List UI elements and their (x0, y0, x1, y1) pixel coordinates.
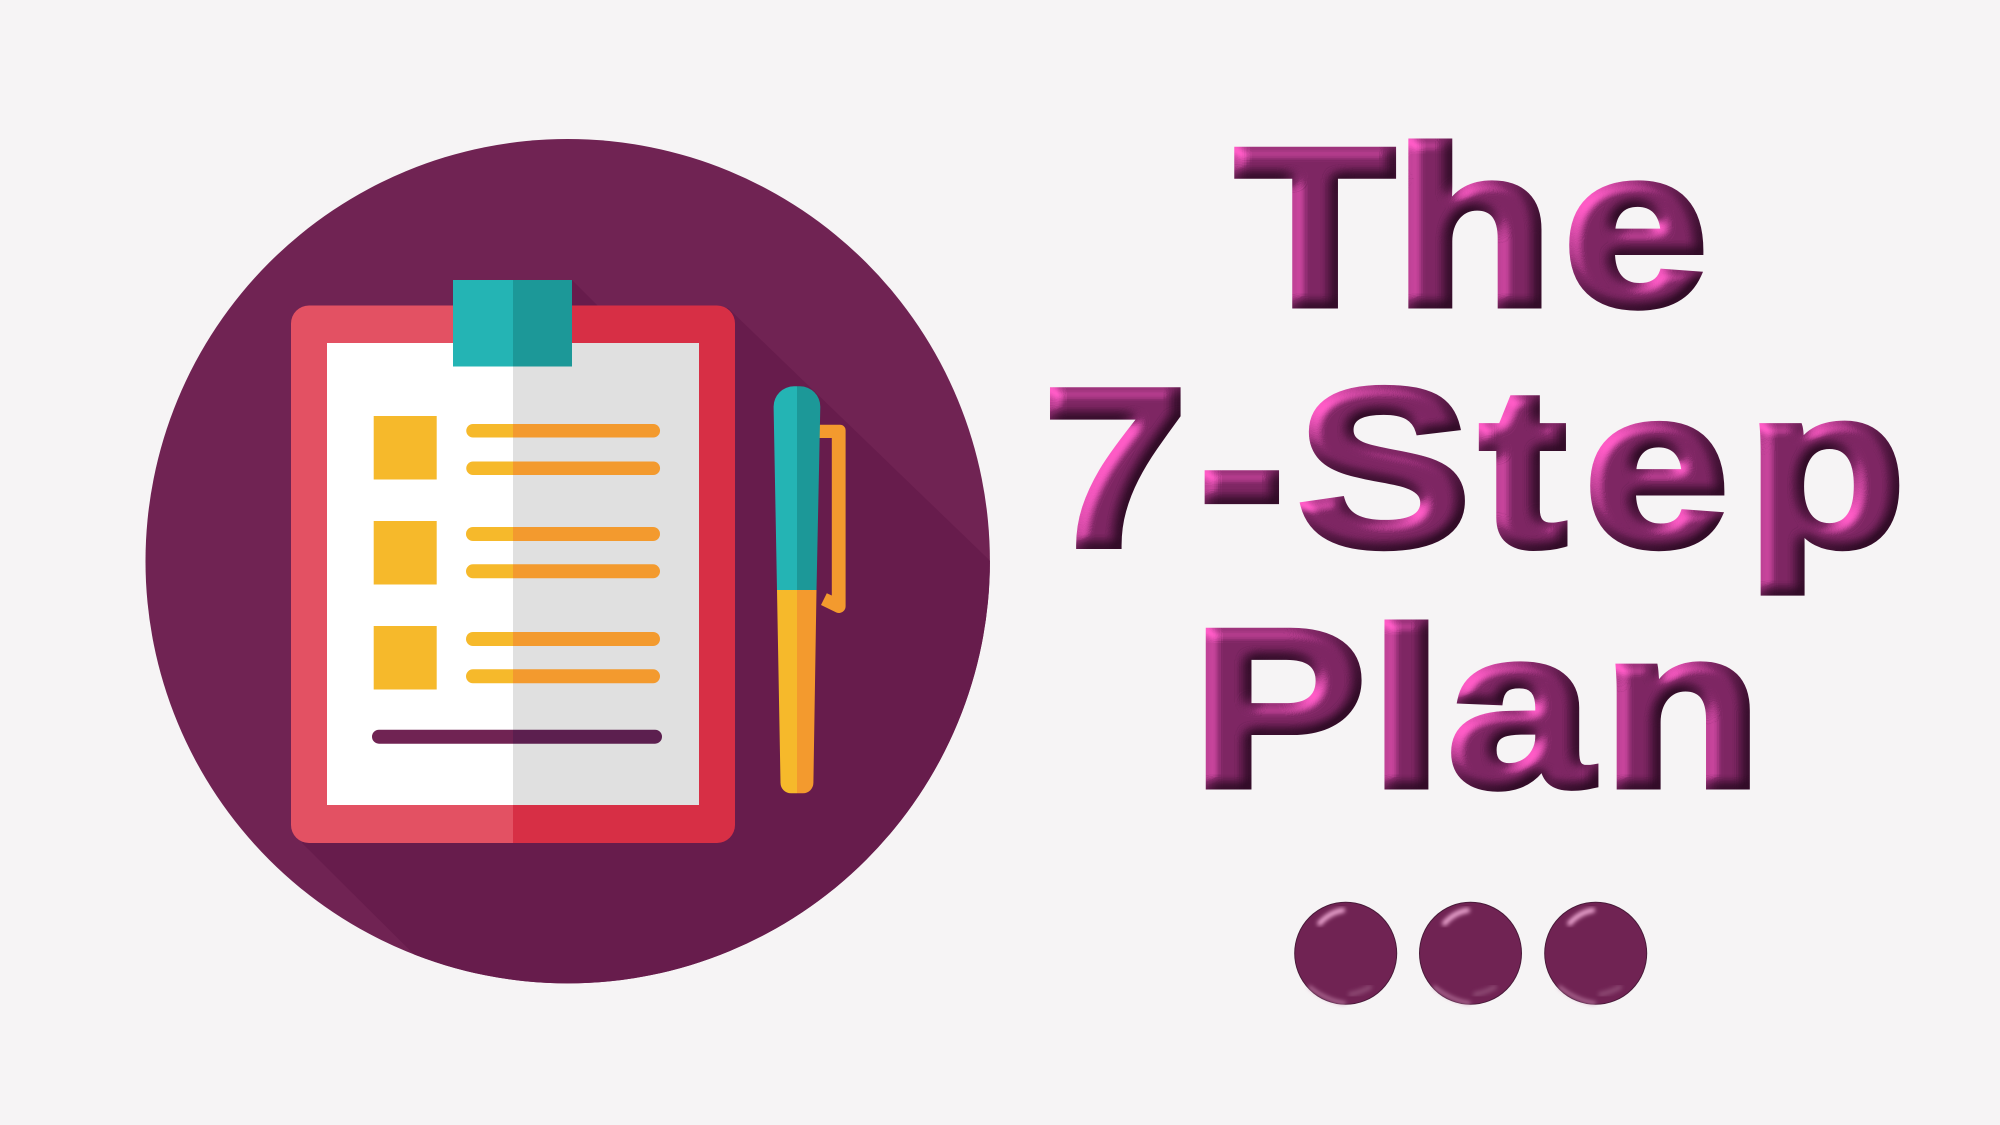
infographic canvas (146, 138, 1900, 1007)
pen (774, 386, 846, 793)
title: The 7-Step Plan (1043, 101, 1906, 834)
clipboard board (291, 306, 735, 843)
title line: Plan: Plan (1192, 582, 1762, 834)
title line: The: The (1235, 101, 1708, 353)
title line: 7-Step: 7-Step (1043, 341, 1906, 594)
checklist row 2 (374, 521, 660, 584)
pen barrel upper (774, 386, 820, 590)
checklist row 1 (374, 416, 660, 480)
dot 2 (1420, 902, 1522, 1004)
paper sheet (327, 343, 699, 805)
purple circle (146, 139, 990, 983)
signature line (372, 730, 662, 744)
icon: clipboard and pen in purple circle (146, 139, 990, 984)
long shadow (302, 280, 990, 984)
clipboard clip (453, 280, 572, 366)
checklist row 3 (374, 626, 660, 690)
pen clip (818, 425, 846, 613)
ellipsis dots (1295, 902, 1647, 1004)
pen barrel lower (777, 590, 816, 793)
dot 3 (1545, 902, 1647, 1004)
dot 1 (1295, 902, 1397, 1004)
